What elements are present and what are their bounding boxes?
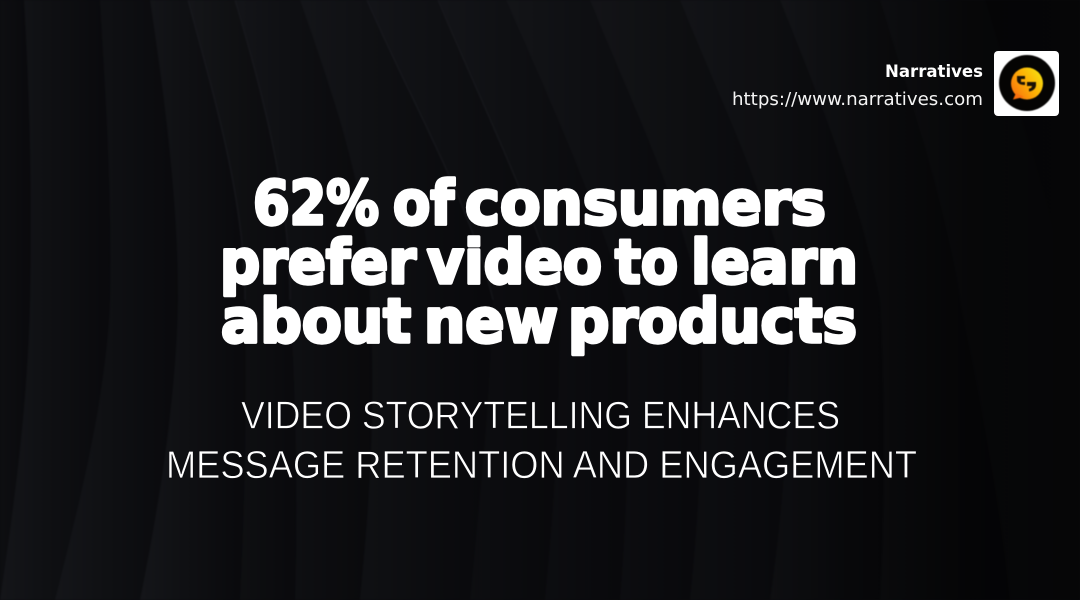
title: about [221,286,411,357]
subtitle: MESSAGE RETENTION AND ENGAGEMENT [166,444,917,487]
title: to [615,227,678,298]
title: video [427,227,602,298]
title: products [568,286,857,357]
title: of [393,168,455,239]
title: learn [691,227,858,298]
title: consumers [465,168,826,239]
title: prefer [220,227,416,298]
subtitle: VIDEO STORYTELLING ENHANCES [241,394,840,438]
title: new [424,286,558,357]
icon: narratives logo [994,51,1059,116]
brand name: Narratives [885,62,983,82]
brand url: https://www.narratives.com [732,89,983,110]
title: 62% [253,168,379,239]
